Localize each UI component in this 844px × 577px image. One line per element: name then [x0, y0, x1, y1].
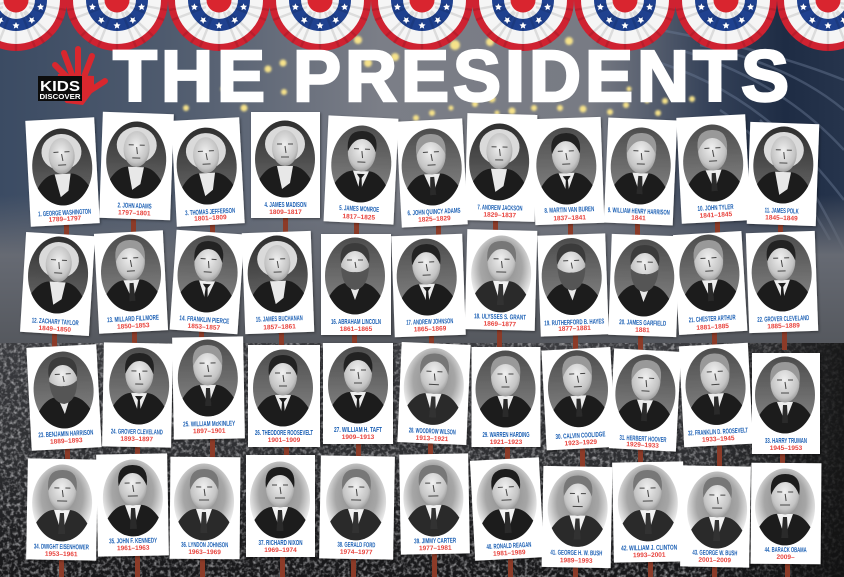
dates: 1929–1933	[626, 441, 659, 450]
card: 40 Ronald Reagan	[470, 457, 544, 561]
portrait	[325, 463, 387, 541]
card: 18 Ulysses S. Grant	[465, 229, 537, 331]
portrait	[470, 235, 532, 313]
title: THE PRESIDENTS	[113, 37, 789, 117]
card: 4 James Madison	[251, 112, 320, 218]
dates: 1849–1850	[38, 325, 72, 334]
card: 29 Warren Harding	[472, 347, 540, 447]
card: 8 Martin Van Buren	[532, 117, 604, 225]
card: 27 William H. Taft	[323, 343, 393, 444]
dates: 1945–1953	[770, 445, 803, 452]
name: 23. BENJAMIN HARRISON	[38, 430, 94, 439]
name: 28. WOODROW WILSON	[409, 427, 456, 436]
portrait	[108, 347, 170, 425]
dates: 1881	[635, 327, 650, 334]
portrait	[546, 349, 610, 429]
name: 25. WILLIAM McKINLEY	[183, 421, 235, 428]
card: 32 Franklin D. Roosevelt	[679, 343, 753, 447]
card: 17 Andrew Johnson	[391, 234, 466, 337]
dates: 1974–1977	[340, 549, 373, 556]
portrait	[174, 463, 234, 541]
portrait	[476, 350, 536, 428]
name: 35. JOHN F. KENNEDY	[109, 538, 157, 545]
dates: 1961–1963	[117, 545, 150, 552]
card: 12 Zachary Taylor	[20, 232, 95, 336]
card: 11 James Polk	[747, 122, 819, 226]
name: 1. GEORGE WASHINGTON	[38, 209, 91, 218]
portrait	[325, 238, 385, 314]
dates: 1923–1929	[564, 439, 598, 447]
portrait	[535, 127, 598, 206]
card: 16 Abraham Lincoln	[321, 234, 391, 335]
dates: 2001–2009	[698, 557, 731, 564]
portrait	[755, 468, 815, 546]
card: 10 John Tyler	[676, 114, 751, 224]
name: 39. JIMMY CARTER	[414, 538, 456, 545]
dates: 1981–1989	[493, 549, 526, 558]
portrait	[246, 234, 309, 314]
dates: 1993–2001	[633, 552, 666, 559]
dates: 1881–1885	[696, 323, 730, 332]
portrait	[755, 356, 815, 434]
name: 6. JOHN QUINCY ADAMS	[407, 208, 461, 217]
portrait	[468, 123, 530, 201]
portrait	[255, 120, 315, 198]
card: 13 Millard Fillmore	[94, 230, 168, 334]
name: 17. ANDREW JOHNSON	[406, 318, 453, 327]
card: 22 Grover Cleveland	[746, 231, 818, 333]
name: 41. GEORGE H. W. BUSH	[550, 550, 602, 557]
card: 30 Calvin Coolidge	[541, 347, 616, 450]
card: 21 Chester Arthur	[673, 231, 747, 335]
dates: 1953–1961	[45, 551, 78, 558]
dates: 1989–1993	[560, 557, 593, 565]
card: 31 Herbert Hoover	[609, 348, 681, 452]
portrait	[613, 353, 677, 433]
portrait	[30, 127, 94, 207]
portrait	[686, 471, 748, 549]
portrait	[617, 464, 679, 542]
name: 18. ULYSSES S. GRANT	[474, 313, 527, 322]
name: 11. JAMES POLK	[765, 207, 799, 216]
card: 15 James Buchanan	[242, 231, 314, 334]
card: 3 Thomas Jefferson	[171, 117, 245, 227]
name: 24. GROVER CLEVELAND	[111, 429, 163, 436]
dates: 1837–1841	[553, 214, 586, 223]
portrait	[330, 124, 393, 204]
name: 29. WARREN HARDING	[482, 432, 530, 439]
portrait	[250, 462, 310, 538]
portrait	[540, 237, 603, 316]
dates: 1885–1889	[767, 322, 800, 331]
card: 33 Harry Truman	[752, 353, 820, 454]
portrait	[613, 238, 676, 318]
card: 34 Dwight Eisenhower	[26, 458, 98, 561]
dates: 1841	[631, 215, 646, 222]
dates: 1977–1981	[419, 545, 452, 552]
card: 23 Benjamin Harrison	[26, 344, 102, 451]
card: 7 Andrew Jackson	[465, 113, 537, 222]
name: 38. GERALD FORD	[337, 542, 375, 549]
name: 13. MILLARD FILLMORE	[107, 315, 159, 324]
portrait	[26, 235, 90, 315]
dates: 1853–1857	[187, 323, 221, 332]
dates: 1789–1797	[49, 215, 82, 224]
card: 37 Richard Nixon	[246, 455, 315, 557]
portrait	[400, 127, 464, 207]
name: 10. JOHN TYLER	[697, 204, 734, 213]
name: 20. JAMES GARFIELD	[619, 319, 666, 328]
name: 21. CHESTER ARTHUR	[689, 315, 736, 324]
logo: Kids Discover	[38, 49, 105, 105]
portrait	[475, 462, 539, 542]
name: 14. FRANKLIN PIERCE	[179, 315, 230, 326]
name: 43. GEORGE W. BUSH	[692, 550, 737, 557]
portrait	[547, 469, 608, 548]
name: 37. RICHARD NIXON	[258, 540, 302, 547]
dates: 1897–1901	[193, 428, 226, 435]
portrait	[402, 347, 465, 426]
name: 19. RUTHERFORD B. HAYES	[544, 318, 605, 328]
dates: 1845–1849	[765, 214, 798, 223]
dates: 1850–1853	[117, 322, 150, 331]
card: 2 John Adams	[99, 112, 174, 220]
dates: 1817–1825	[342, 213, 376, 222]
card: 28 Woodrow Wilson	[397, 342, 471, 445]
dates: 1969–1974	[264, 547, 297, 554]
card: 6 John Quincy Adams	[396, 118, 468, 228]
logo: Kids Discover: KIDS	[40, 78, 80, 95]
name: 33. HARRY TRUMAN	[765, 438, 807, 445]
portrait	[328, 346, 388, 424]
portrait	[105, 120, 168, 200]
card: 43 George W. Bush	[680, 465, 751, 568]
portrait	[684, 346, 748, 427]
card: 38 Gerald Ford	[319, 455, 395, 560]
card: 39 Jimmy Carter	[399, 453, 470, 555]
name: 22. GROVER CLEVELAND	[757, 315, 809, 324]
dates: 1913–1921	[416, 435, 449, 443]
name: 3. THOMAS JEFFERSON	[185, 208, 235, 217]
portrait	[102, 459, 164, 537]
card: 44 Barack Obama	[751, 463, 821, 564]
logo: Kids Discover: DISCOVER	[40, 92, 81, 101]
portrait	[253, 350, 313, 426]
card: 35 John F. Kennedy	[96, 453, 169, 557]
dates: 1857–1861	[263, 323, 296, 332]
dates: 1893–1897	[120, 436, 153, 443]
dates: 1909–1913	[342, 434, 375, 441]
dates: 1809–1817	[269, 209, 302, 216]
portrait	[750, 233, 813, 313]
name: 40. RONALD REAGAN	[486, 542, 532, 551]
dates: 2009–	[777, 554, 795, 561]
portrait	[403, 459, 464, 537]
dates: 1797–1801	[118, 209, 151, 218]
placard sticks	[52, 214, 790, 577]
dates: 1829–1837	[483, 212, 516, 219]
portrait	[681, 123, 745, 203]
name: 32. FRANKLIN D. ROOSEVELT	[688, 427, 749, 438]
dates: 1841–1845	[699, 211, 733, 220]
card: 14 Franklin Pierce	[170, 230, 244, 334]
name: 16. ABRAHAM LINCOLN	[331, 319, 381, 326]
portrait	[752, 125, 815, 205]
dates: 1901–1909	[268, 437, 301, 444]
bunting row	[0, 0, 844, 51]
name: 26. THEODORE ROOSEVELT	[255, 430, 313, 437]
card: 41 George H. W. Bush	[542, 466, 612, 568]
placards	[20, 112, 821, 568]
card: 24 Grover Cleveland	[102, 342, 173, 448]
dates: 1889–1893	[50, 437, 83, 446]
name: 8. MARTIN VAN BUREN	[544, 206, 594, 215]
dates: 1877–1881	[558, 325, 591, 333]
portrait	[99, 233, 163, 313]
dates: 1801–1809	[194, 214, 227, 223]
portrait	[175, 234, 240, 315]
stage lights	[183, 36, 695, 121]
name: 31. HERBERT HOOVER	[619, 435, 667, 444]
dates: 1869–1877	[483, 321, 517, 328]
dates: 1963–1969	[188, 549, 221, 556]
portrait	[677, 233, 742, 313]
dates: 1921–1923	[490, 439, 523, 446]
dates: 1865–1869	[414, 325, 447, 334]
card: 5 James Monroe	[324, 115, 398, 225]
name: 12. ZACHARY TAYLOR	[31, 318, 79, 327]
portrait	[175, 126, 239, 206]
portrait	[31, 464, 93, 542]
card: 36 Lyndon Johnson	[170, 457, 240, 559]
card: 42 William J. Clinton	[612, 461, 685, 563]
card: 26 Theodore Roosevelt	[248, 345, 320, 447]
portrait	[609, 126, 672, 206]
dates: 1861–1865	[340, 326, 373, 333]
name: 7. ANDREW JACKSON	[477, 204, 523, 213]
portrait	[395, 238, 458, 317]
name: 36. LYNDON JOHNSON	[181, 542, 228, 549]
portrait	[32, 350, 96, 430]
card: 1 George Washington	[25, 117, 100, 227]
name: 5. JAMES MONROE	[339, 205, 379, 214]
dates: 1825–1829	[418, 215, 451, 224]
name: 34. DWIGHT EISENHOWER	[34, 544, 89, 551]
name: 27. WILLIAM H. TAFT	[334, 427, 382, 434]
name: 4. JAMES MADISON	[264, 202, 306, 209]
card: 20 James Garfield	[608, 234, 680, 337]
card: 25 William McKinley	[172, 336, 245, 440]
name: 2. JOHN ADAMS	[117, 202, 152, 211]
name: 15. JAMES BUCHANAN	[256, 315, 303, 324]
name: 42. WILLIAM J. CLINTON	[621, 545, 677, 552]
name: 44. BARACK OBAMA	[765, 547, 807, 554]
portrait	[177, 339, 238, 417]
name: 9. WILLIAM HENRY HARRISON	[608, 207, 670, 217]
dates: 1933–1945	[702, 435, 735, 444]
card: 9 William Henry Harrison	[604, 118, 677, 225]
card: 19 Rutherford B. Hayes	[537, 233, 609, 337]
name: 30. CALVIN COOLIDGE	[555, 431, 606, 441]
